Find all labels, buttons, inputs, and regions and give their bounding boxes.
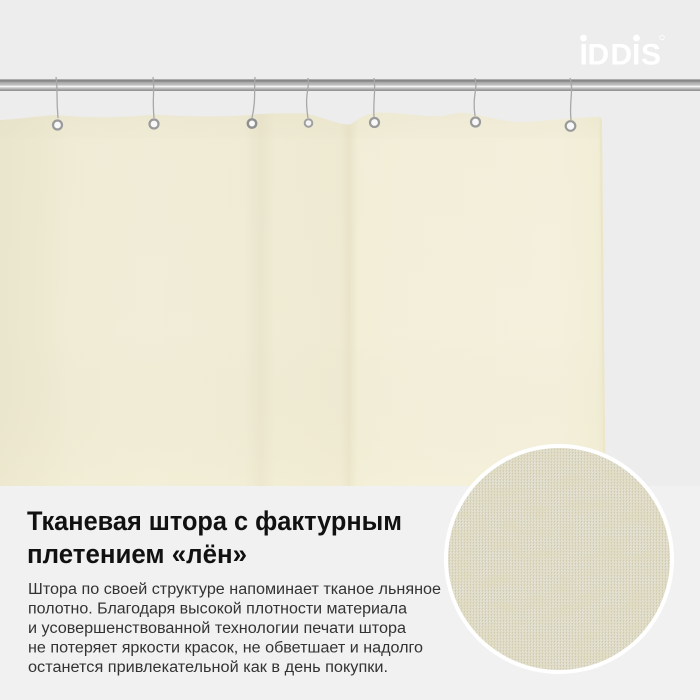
body text: полотно. Благодаря высокой плотности материала <box>28 600 407 618</box>
heading <box>27 506 402 569</box>
ring 7 <box>566 78 575 131</box>
ring 2 <box>150 77 158 128</box>
curtain <box>0 112 606 486</box>
body text: и усовершенствованной технологии печати штора <box>28 620 406 637</box>
body text: останется привлекательной как в день покупки. <box>28 659 388 676</box>
fabric close-up circle <box>444 444 674 674</box>
body text <box>28 581 441 676</box>
ring 6 <box>471 78 480 126</box>
registered mark <box>660 35 664 40</box>
bottom text panel <box>0 486 700 700</box>
ring 5 <box>370 78 379 127</box>
curtain rings <box>53 77 575 131</box>
shower rod <box>0 79 700 91</box>
heading: Тканевая штора с фактурным <box>27 506 402 536</box>
ring 1 <box>53 77 62 130</box>
heading: плетением «лён» <box>27 539 247 569</box>
curtain side hem <box>600 117 606 486</box>
body text: Штора по своей структуре напоминает тканое льняное <box>28 581 441 598</box>
logo: IDDIS <box>580 38 661 72</box>
body text: не потеряет яркости красок, не обветшает и надолго <box>28 640 423 656</box>
ring 3 <box>248 77 256 128</box>
ring 4 <box>305 78 312 127</box>
